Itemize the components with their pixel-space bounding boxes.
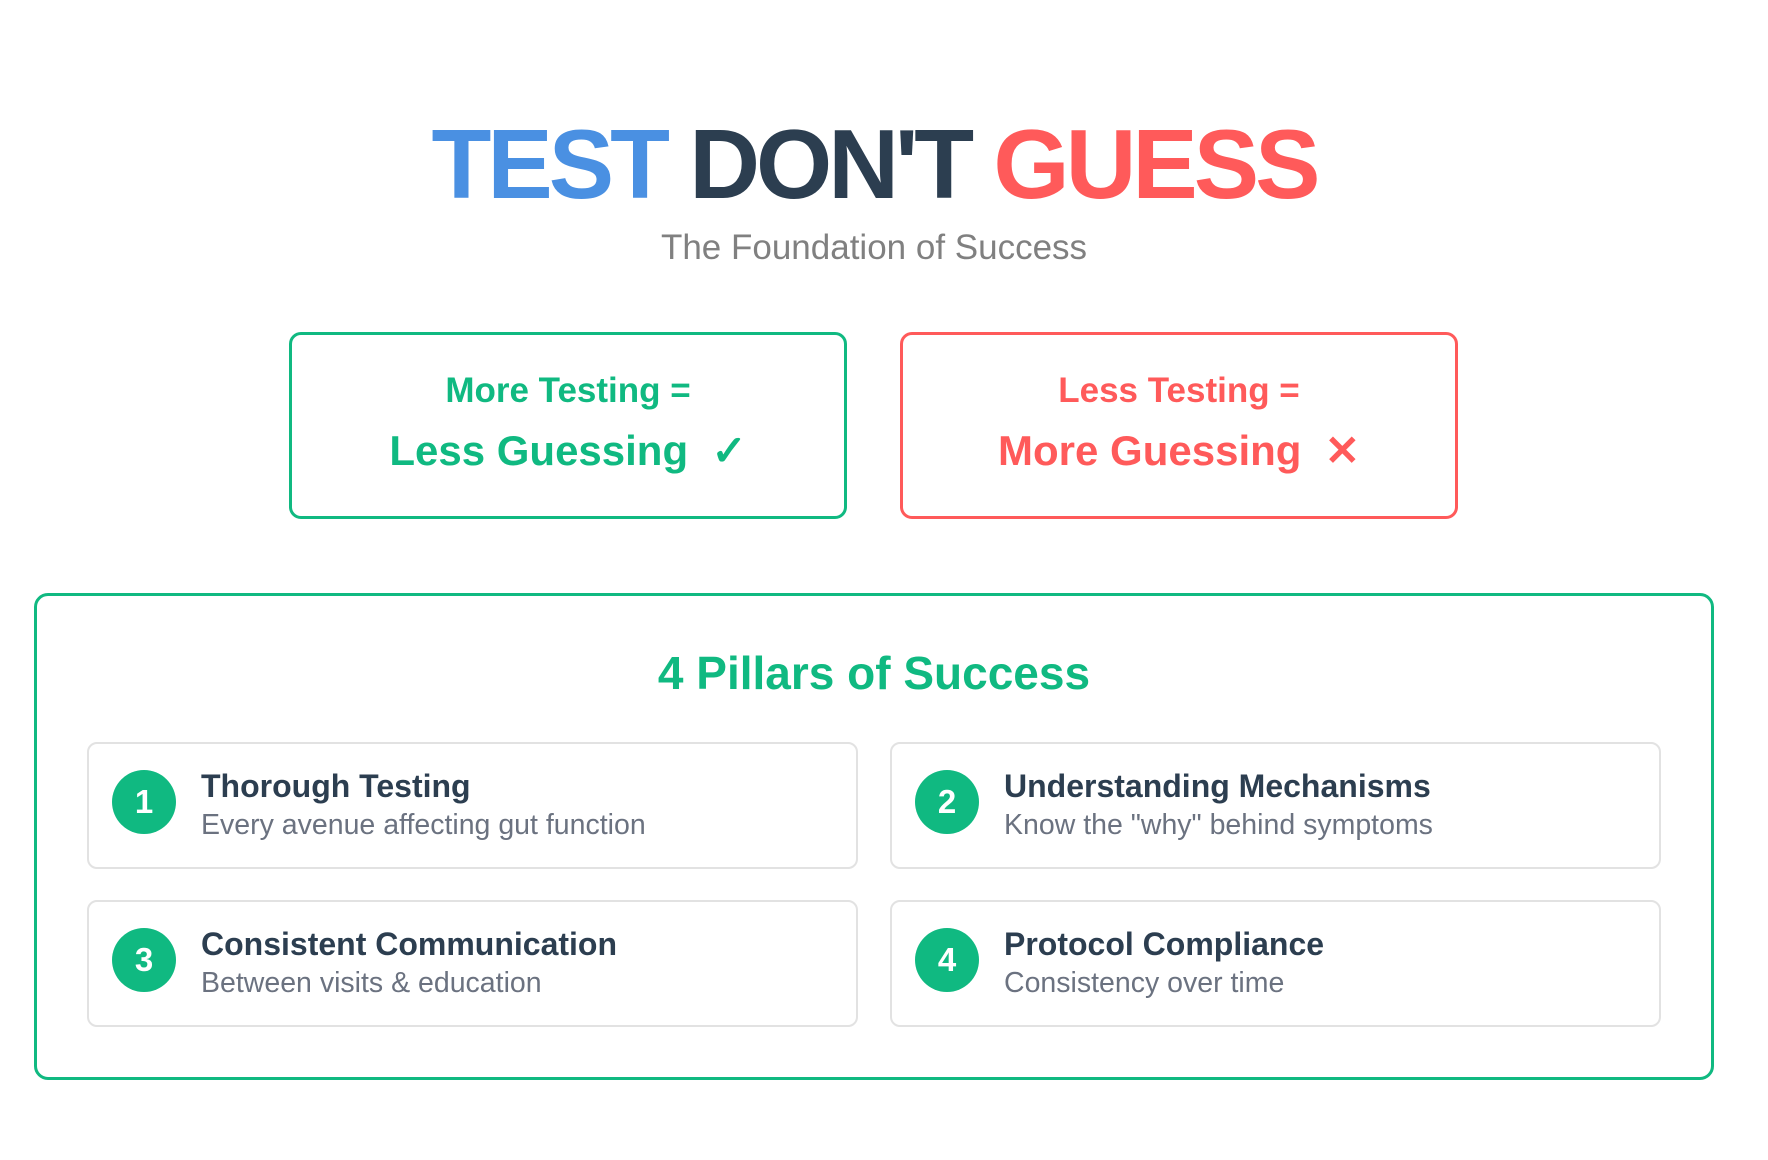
- card 4: Consistency over time: [1004, 967, 1284, 999]
- card 3: Between visits & education: [201, 967, 542, 999]
- panel: pillars: [34, 593, 1714, 1080]
- title: TEST DON'T GUESS: [432, 109, 1316, 219]
- panel: more testing: Less Guessing ✓: [389, 427, 747, 474]
- card 1: Thorough Testing: [201, 768, 471, 804]
- card 1: [87, 742, 858, 869]
- card 2: [890, 742, 1661, 869]
- card 3: [87, 900, 858, 1027]
- card 4: [890, 900, 1661, 1027]
- card 1: Every avenue affecting gut function: [201, 809, 646, 841]
- card 2: Know the "why" behind symptoms: [1004, 809, 1433, 841]
- card 3: Consistent Communication: [201, 926, 617, 962]
- card 1: 1: [135, 783, 153, 820]
- card 4: 4: [938, 941, 956, 978]
- pillars heading: 4 Pillars of Success: [658, 647, 1090, 699]
- panel: more testing: More Testing =: [445, 371, 691, 410]
- card 2: Understanding Mechanisms: [1004, 768, 1431, 804]
- card 2: 2: [938, 783, 956, 820]
- card 3: 3: [135, 941, 153, 978]
- card 4: Protocol Compliance: [1004, 926, 1324, 962]
- panel: less testing: More Guessing ✕: [998, 427, 1360, 474]
- panel: less testing: Less Testing =: [1058, 371, 1300, 410]
- panel: less testing: [900, 332, 1458, 519]
- panel: more testing: [289, 332, 847, 519]
- subtitle: The Foundation of Success: [661, 228, 1087, 267]
